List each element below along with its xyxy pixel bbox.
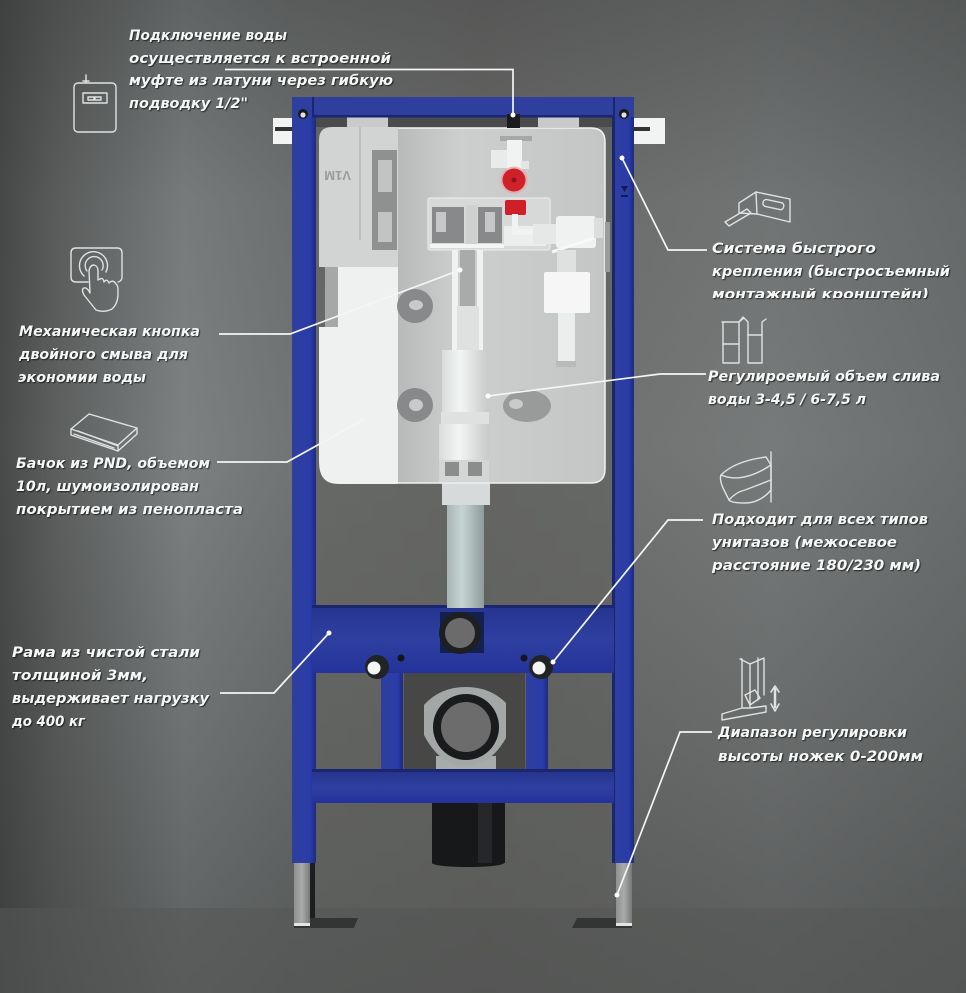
cistern left section xyxy=(319,127,398,484)
text: tank: покрытием из пенопласта xyxy=(16,502,243,518)
icon: flush volume tanks xyxy=(722,317,766,363)
text: flush button: экономии воды xyxy=(18,370,146,386)
cistern left section: V1M xyxy=(324,168,351,183)
leader: toilets xyxy=(550,520,703,664)
dark recess ovals xyxy=(397,289,551,422)
side posts xyxy=(292,97,316,863)
text: frame xyxy=(11,645,210,730)
cistern xyxy=(319,114,610,484)
icon: wall-hung toilet xyxy=(720,452,771,503)
text: tank: Бачок из PND, объемом xyxy=(16,456,210,472)
leader: frame xyxy=(220,630,332,693)
text: frame: Рама из чистой стали xyxy=(12,645,200,661)
cistern interior xyxy=(397,128,605,483)
text: frame: до 400 кг xyxy=(11,714,86,730)
leader: volume xyxy=(486,374,706,398)
text: tank: 10л, шумоизолирован xyxy=(16,479,199,495)
wall mounting plates xyxy=(273,118,665,144)
text: water connection: муфте из латуни через гибкую xyxy=(129,73,393,89)
leader lines xyxy=(217,70,712,898)
post bolts xyxy=(298,109,629,119)
middle bar xyxy=(312,607,614,673)
icon: cistern panel xyxy=(74,75,116,132)
text: quick mount xyxy=(712,241,950,303)
black drain pipe xyxy=(432,803,505,867)
icon: hand pressing button xyxy=(71,248,122,311)
text: frame: толщиной 3мм, xyxy=(12,668,148,684)
outlet elbow xyxy=(404,673,525,772)
text: water connection: осуществляется к встроенной xyxy=(129,51,391,67)
icon: mounting bracket xyxy=(725,192,790,226)
top bar xyxy=(292,97,634,117)
metal legs xyxy=(294,863,632,928)
text: flush button: двойного смыва для xyxy=(18,347,188,363)
flush valve cylinder xyxy=(439,350,489,482)
text: flush button: Механическая кнопка xyxy=(19,324,200,340)
text: flush volume: Регулироемый объем слива xyxy=(708,369,940,385)
water inlet valve xyxy=(491,114,536,232)
text: toilets xyxy=(711,512,928,574)
text: tank xyxy=(16,456,243,518)
icon: foam sheet xyxy=(71,414,137,451)
text: frame: выдерживает нагрузку xyxy=(12,691,210,707)
leader: water connection xyxy=(225,70,516,118)
leader: quick mount xyxy=(620,156,707,250)
text: flush volume xyxy=(708,369,940,408)
text: toilets: расстояние 180/230 мм) xyxy=(711,558,921,574)
text: water connection: Подключение воды xyxy=(129,28,287,44)
text: flush button xyxy=(18,324,200,386)
installation frame xyxy=(273,97,665,928)
text: water connection: подводку 1/2" xyxy=(129,96,248,112)
connection socket xyxy=(439,612,484,654)
mounting studs xyxy=(365,654,553,679)
flush button mechanism xyxy=(428,198,550,250)
text: legs: высоты ножек 0-200мм xyxy=(718,749,923,765)
leader: flush button xyxy=(219,268,462,334)
text: flush volume: воды 3-4,5 / 6-7,5 л xyxy=(708,392,866,408)
flush pipe xyxy=(442,483,490,608)
text: water connection xyxy=(129,28,393,112)
post marker xyxy=(621,186,628,197)
lower bar xyxy=(312,772,614,803)
short vertical braces xyxy=(381,673,403,772)
icon: adjustable leg xyxy=(722,658,779,720)
flush rods xyxy=(452,250,483,360)
text: toilets: Подходит для всех типов xyxy=(712,512,928,528)
leader: legs xyxy=(614,732,712,898)
fill valve and float xyxy=(533,216,603,367)
text: quick mount: монтажный кронштейн) xyxy=(712,287,929,303)
leader: tank xyxy=(217,420,363,462)
text: toilets: унитазов (межосевое xyxy=(712,535,897,551)
text: legs: Диапазон регулировки xyxy=(717,725,907,741)
text: legs xyxy=(717,725,923,765)
text: quick mount: Система быстрого xyxy=(712,241,876,257)
text: quick mount: крепления (быстросъемный xyxy=(712,264,950,280)
